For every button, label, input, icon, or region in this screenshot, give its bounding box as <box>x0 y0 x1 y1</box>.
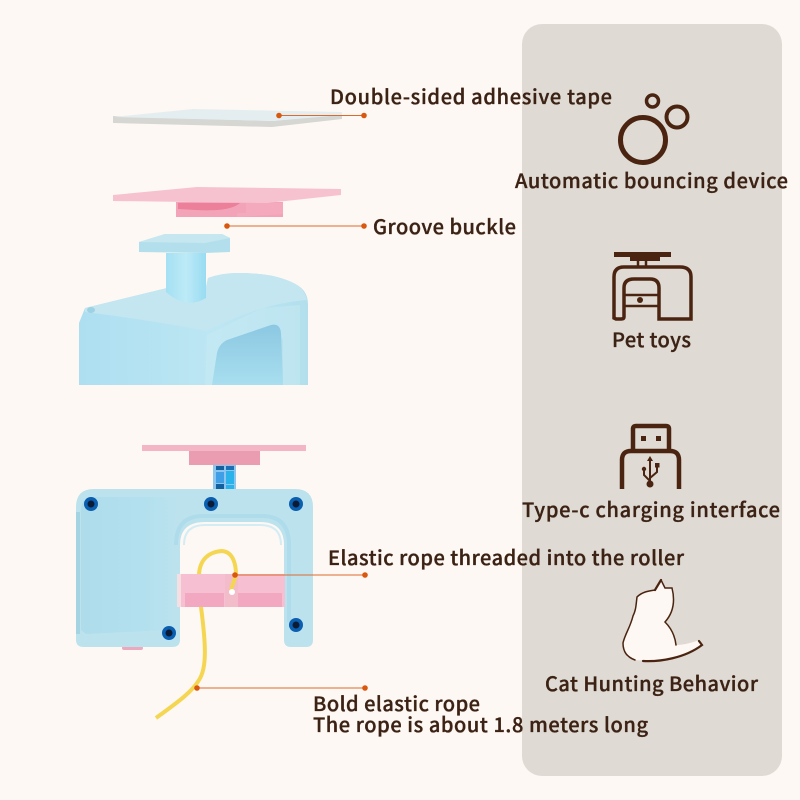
label: adhesive tape: Double-sided adhesive tape <box>330 81 612 110</box>
label: bold elastic rope <box>313 688 648 738</box>
feature label: charging interface: Type-c charging interface <box>522 494 780 523</box>
panel: features <box>522 24 782 776</box>
leader line: roller <box>232 572 368 578</box>
icon: usb charging <box>622 426 679 489</box>
pink groove buckle plate <box>113 187 341 217</box>
pink foot <box>122 646 143 650</box>
label: bold elastic rope: The rope is about 1.8 meters long <box>313 709 648 738</box>
feature label: pet toys: Pet toys <box>612 324 691 353</box>
leader line: adhesive tape <box>276 113 367 118</box>
exploded view: front assembly <box>76 445 313 718</box>
feature label: cat hunting: Cat Hunting Behavior <box>545 668 759 697</box>
pink plate, front view <box>142 445 306 465</box>
pink roller <box>177 574 285 607</box>
leader line: elastic rope <box>194 685 368 691</box>
leader line: groove buckle <box>224 223 367 229</box>
label: bold elastic rope: Bold elastic rope <box>313 688 480 717</box>
icon: cat silhouette <box>623 580 702 661</box>
label: elastic rope threaded: Elastic rope threaded into the roller <box>328 542 685 571</box>
screw holes <box>84 497 303 640</box>
yellow elastic rope <box>156 551 236 718</box>
blue housing, front view <box>76 489 313 647</box>
feature label: bouncing device: Automatic bouncing device <box>515 165 788 194</box>
adhesive tape layer <box>113 109 342 127</box>
icon: bubbles <box>620 95 688 162</box>
blue housing body <box>79 234 308 385</box>
icon: pet toy desk <box>614 252 691 319</box>
exploded view: top assembly <box>79 109 342 385</box>
blue connector stem <box>213 465 236 490</box>
label: groove buckle: Groove buckle <box>373 211 516 240</box>
